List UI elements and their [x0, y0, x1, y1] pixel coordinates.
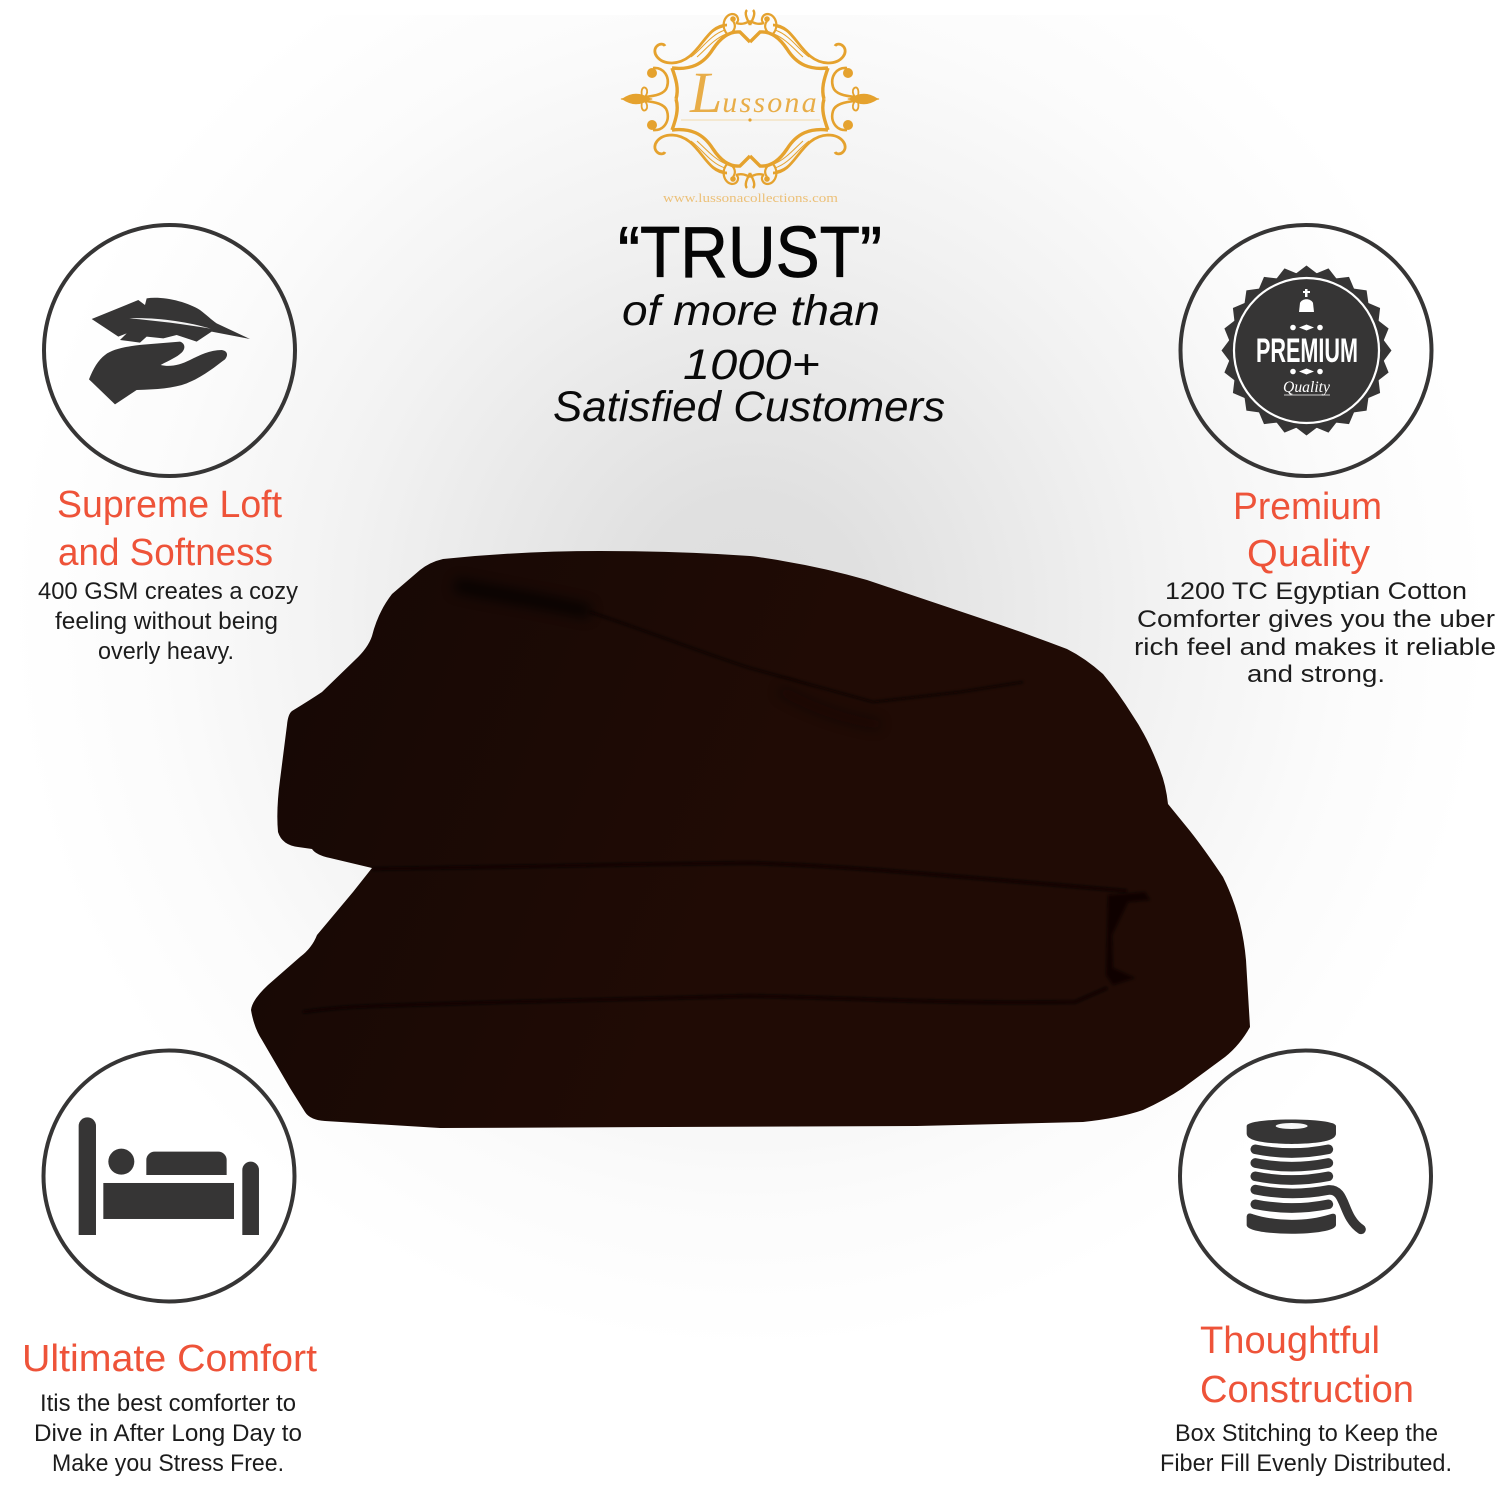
- badge crown: [1299, 289, 1314, 312]
- icon: premium badge: [1180, 225, 1432, 476]
- logo: Lussona crest: [623, 10, 877, 205]
- text: supreme loft description: overly heavy.: [98, 638, 234, 665]
- logo wordmark: Lussona: [689, 60, 819, 125]
- heading: supreme loft: and Softness: [58, 532, 273, 574]
- panel: supreme loft: [38, 225, 298, 665]
- heading: ultimate comfort: Ultimate Comfort: [22, 1338, 317, 1380]
- text: ultimate comfort description: Itis the best comforter to: [40, 1390, 296, 1417]
- text: thoughtful construction description: Box Stitching to Keep the: [1175, 1420, 1438, 1447]
- text: supreme loft description: 400 GSM creates a cozy: [38, 578, 298, 605]
- upper fold line: [372, 863, 1127, 891]
- side gather shadow: [1106, 892, 1150, 985]
- text: ultimate comfort description: Dive in After Long Day to: [34, 1420, 302, 1447]
- text: supreme loft description: [38, 578, 298, 665]
- panel: ultimate comfort: [22, 1050, 317, 1477]
- text: thoughtful construction description: [1160, 1420, 1452, 1477]
- panel: thoughtful construction: [1160, 1050, 1452, 1477]
- text: premium quality description: rich feel and makes it reliable: [1134, 634, 1496, 661]
- ornament frame: [623, 10, 877, 188]
- icon: bed: [44, 1050, 294, 1302]
- comforter silhouette: [240, 540, 1260, 1140]
- logo url: www.lussonacollections.com: [663, 190, 838, 205]
- text: premium quality description: and strong.: [1247, 661, 1385, 688]
- headline: of more than: of more than: [622, 287, 880, 335]
- logo rule: [681, 118, 820, 122]
- heading: supreme loft: Supreme Loft: [57, 484, 282, 526]
- text: supreme loft description: feeling without being: [55, 608, 278, 635]
- panel: premium quality: [1134, 225, 1496, 688]
- heading: premium quality: [1233, 486, 1382, 575]
- text: premium quality description: 1200 TC Egyptian Cotton: [1165, 578, 1467, 605]
- heading: thoughtful construction: [1200, 1320, 1414, 1411]
- badge word quality: Quality: [1283, 379, 1331, 396]
- icon: feather over hand: [44, 225, 295, 476]
- heading: thoughtful construction: Construction: [1200, 1369, 1414, 1411]
- headline: [553, 213, 945, 431]
- text: premium quality description: Comforter gives you the uber: [1137, 606, 1495, 633]
- heading: supreme loft: [57, 484, 282, 574]
- top flap fold: [590, 612, 1023, 702]
- headline: satisfied customers: Satisfied Customers: [553, 383, 945, 431]
- icon: thread spool: [1180, 1050, 1431, 1302]
- text: thoughtful construction description: Fiber Fill Evenly Distributed.: [1160, 1450, 1452, 1477]
- text: ultimate comfort description: Make you Stress Free.: [52, 1450, 284, 1477]
- text: premium quality description: [1134, 578, 1496, 688]
- badge dots: [1290, 324, 1323, 374]
- top flap shadow: [455, 585, 590, 612]
- heading: thoughtful construction: Thoughtful: [1200, 1320, 1380, 1362]
- heading: premium quality: Premium: [1233, 486, 1382, 528]
- badge word premium: PREMIUM: [1256, 332, 1358, 370]
- flap drop shadow: [780, 690, 880, 725]
- heading: premium quality: Quality: [1247, 533, 1370, 575]
- lower fold line: [303, 988, 1107, 1012]
- headline: trust: “TRUST”: [618, 213, 882, 293]
- text: ultimate comfort description: [34, 1390, 302, 1477]
- headline: 1000+: 1000+: [683, 341, 820, 389]
- comforter: [240, 540, 1260, 1140]
